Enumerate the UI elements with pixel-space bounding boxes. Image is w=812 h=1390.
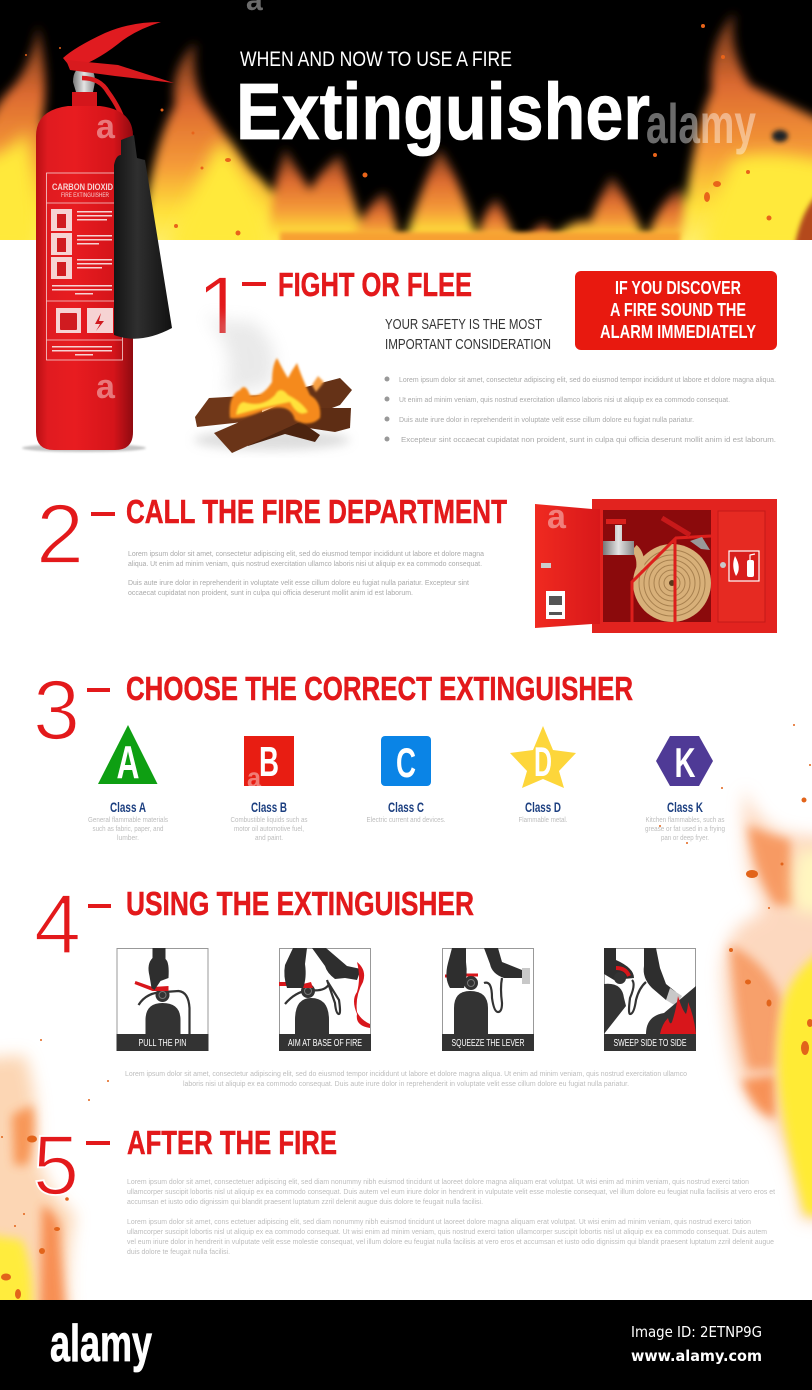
dash xyxy=(87,688,110,692)
icon: campfire xyxy=(194,315,352,453)
step: pull the pin: PULL THE PIN xyxy=(138,1038,186,1049)
class C badge xyxy=(381,736,431,786)
class A badge: A xyxy=(116,736,140,788)
class B badge: B xyxy=(259,738,279,785)
open door xyxy=(535,504,600,628)
class D badge xyxy=(510,726,576,788)
flames xyxy=(230,358,320,424)
heading: main title: Extinguisher xyxy=(236,67,650,156)
bracket xyxy=(632,536,711,622)
step: sweep side to side xyxy=(604,948,696,1051)
fire classes row xyxy=(88,725,725,842)
class D label: Class D xyxy=(525,799,561,815)
heading: small title line: WHEN AND NOW TO USE A FIRE xyxy=(240,48,512,71)
smoke xyxy=(205,315,274,395)
step: aim at base of fire xyxy=(279,948,371,1051)
upper lever xyxy=(63,22,161,69)
step: pull the pin xyxy=(116,948,208,1051)
section 5 heading group xyxy=(33,1118,337,1212)
silver valve xyxy=(73,67,95,92)
footer logo: alamy xyxy=(50,1315,152,1373)
number 4: 4 xyxy=(34,877,81,971)
class C badge: C xyxy=(396,739,416,786)
class K label: Kitchen flammables, such as xyxy=(646,817,725,824)
logs xyxy=(195,395,262,427)
fire extinguisher xyxy=(22,22,174,452)
class D badge: D xyxy=(534,738,552,785)
title: USING THE EXTINGUISHER xyxy=(126,885,474,922)
alarm callout: IF YOU DISCOVER xyxy=(615,278,741,298)
header fire band xyxy=(0,0,812,255)
step: aim at base of fire: AIM AT BASE OF FIRE xyxy=(288,1038,362,1049)
section 2 body text: aliqua. Ut enim ad minim veniam, quis nostrud exercitation ullamco laboris nisi ut aliquip ex ea commodo consequat. xyxy=(128,561,482,568)
safety statement: YOUR SAFETY IS THE MOST xyxy=(385,316,542,333)
class K badge xyxy=(656,736,713,786)
section 4 body text: laboris nisi ut aliquip ex ea commodo consequat. Duis aute irure dolor in reprehenderit in voluptate velit esse cillum dolore eu fugiat nulla pariatur. xyxy=(183,1081,629,1088)
step: squeeze the lever xyxy=(442,948,534,1051)
class B badge xyxy=(244,736,294,793)
class K label: Class K xyxy=(667,799,703,815)
class A label: General flammable materials xyxy=(88,817,168,824)
door sticker xyxy=(546,591,565,619)
section 2 body text: occaecat cupidatat non proident, sunt in culpa qui officia deserunt mollit anim id est laborum. xyxy=(128,590,413,597)
class K label xyxy=(645,799,725,842)
section 4 body text: Lorem ipsum dolor sit amet, consectetur adipiscing elit, sed do eiusmod tempor incididunt ut labore et dolore magna aliqua. Ut enim ad minim veniam, quis nostrud exercitation ullamco xyxy=(125,1071,687,1078)
hose coil xyxy=(633,544,711,622)
alarm callout xyxy=(575,271,777,350)
class B label: motor oil automotive fuel, xyxy=(234,826,304,833)
section 4 heading group xyxy=(34,877,474,971)
base glow xyxy=(278,228,682,240)
section 5 body text: accumsan et iusto odio dignissim qui blandit praesent luptatum zzril delenit augue duis dolore te feugait nulla facilisi. xyxy=(127,1199,483,1206)
section 5 body text: ullamcorper suscipit lobortis nisl ut aliquip ex ea commodo consequat. Duis autem vel eum iriure dolor in hendrerit in vulputate velit esse molestie consequat, vel illum dolore eu feugiat nulla facilisis at vero eros et xyxy=(127,1189,775,1196)
class B label: Combustible liquids such as xyxy=(230,817,308,824)
label pictograms xyxy=(51,209,113,356)
number 3: 3 xyxy=(33,663,80,757)
hose xyxy=(82,78,128,140)
safety statement: IMPORTANT CONSIDERATION xyxy=(385,336,551,353)
section 3 heading group xyxy=(33,663,633,757)
safety statement xyxy=(385,316,551,353)
cylinder body xyxy=(36,106,133,450)
bullet list: Excepteur sint occaecat cupidatat non proident, sunt in culpa qui officia deserunt mollit anim id est laborum. xyxy=(401,437,776,444)
image id: Image ID: 2ETNP9G xyxy=(631,1323,762,1341)
section 5 body text: duis dolore te feugait nulla facilisi. xyxy=(127,1249,230,1256)
class C label xyxy=(366,799,446,824)
step: sweep side to side: SWEEP SIDE TO SIDE xyxy=(614,1038,687,1049)
step: squeeze the lever: SQUEEZE THE LEVER xyxy=(452,1038,524,1049)
lower lever xyxy=(66,60,174,83)
embers xyxy=(25,24,772,236)
section 2 heading group xyxy=(36,487,507,581)
right door xyxy=(718,511,765,622)
alarm callout: A FIRE SOUND THE xyxy=(610,300,746,320)
section 5 body text: Lorem ipsum dolor sit amet, consectetuer adipiscing elit, sed diam nonummy nibh euismod tincidunt ut laoreet dolore magna aliquam erat volutpat. Ut wisi enim ad minim veniam, quis nostrud exerci tation xyxy=(127,1179,749,1186)
title: CALL THE FIRE DEPARTMENT xyxy=(126,493,507,530)
label title: CARBON DIOXID xyxy=(52,182,113,193)
class A badge xyxy=(98,725,158,788)
class D label: Flammable metal. xyxy=(518,817,568,824)
extinguisher sign xyxy=(729,551,759,581)
class A label: Class A xyxy=(110,799,146,815)
bullet list xyxy=(384,376,776,444)
footer url: www.alamy.com xyxy=(631,1347,762,1365)
tap xyxy=(603,525,634,555)
watermark wordmark: alamy xyxy=(646,92,756,155)
class B label: Class B xyxy=(251,799,287,815)
label xyxy=(46,173,122,360)
section 2 body text: Lorem ipsum dolor sit amet, consectetur adipiscing elit, sed do eiusmod tempor incididunt ut labore et dolore magna xyxy=(128,551,484,558)
class A label: such as fabric, paper, and xyxy=(92,826,164,833)
section 5 body text: ullamcorper suscipit lobortis nisl ut aliquip ex ea commodo consequat. Ut wisi enim ad minim veniam, quis nostrud exerci tation ullamcorper suscipit lobortis nisl ut aliquip ex ea commodo consequat. Duis autem xyxy=(127,1229,767,1236)
bullet list: Duis aute irure dolor in reprehenderit in voluptate velit esse cillum dolore eu fugiat nulla pariatur. xyxy=(399,417,694,424)
shadow xyxy=(22,444,146,452)
class K label: pan or deep fryer. xyxy=(661,835,709,842)
title: FIGHT OR FLEE xyxy=(278,266,472,303)
class B badge: a xyxy=(247,762,261,793)
neck xyxy=(72,92,97,112)
dash xyxy=(242,282,266,286)
section 5 body text xyxy=(127,1179,775,1256)
class K label: grease or fat used in a frying xyxy=(645,826,725,833)
hose cabinet xyxy=(535,498,777,633)
dash xyxy=(91,512,115,516)
bullet list: Ut enim ad minim veniam, quis nostrud exercitation ullamco laboris nisi ut aliquip ex ea commodo consequat. xyxy=(399,397,730,404)
class A label xyxy=(88,799,168,842)
bullet list: Lorem ipsum dolor sit amet, consectetur adipiscing elit, sed do eiusmod tempor incididunt ut labore et dolore magna aliqua. xyxy=(399,377,776,384)
label subtitle: FIRE EXTINGUISHER xyxy=(61,193,110,199)
lower left flames xyxy=(0,1039,109,1320)
class B label: and paint. xyxy=(255,835,283,842)
black horn xyxy=(114,135,172,339)
section 2 body text: Duis aute irure dolor in reprehenderit in voluptate velit esse cillum dolore eu fugiat nulla pariatur. Excepteur sint xyxy=(128,580,469,587)
section 5 body text: Lorem ipsum dolor sit amet, cons ectetuer adipiscing elit, sed diam nonummy nibh euismod tincidunt ut laoreet dolore magna aliquam erat volutpat. Ut wisi enim ad minim veniam, quis nostrud exerci tation xyxy=(127,1219,751,1226)
yellow flame cores xyxy=(0,128,812,240)
right side flames xyxy=(659,724,812,1225)
dash xyxy=(88,904,111,908)
flames xyxy=(0,12,812,255)
class D label xyxy=(518,799,568,824)
door handle xyxy=(541,563,551,568)
cabinet interior xyxy=(603,510,711,622)
section 4 body text xyxy=(125,1071,687,1088)
title: AFTER THE FIRE xyxy=(127,1124,337,1161)
watermark letters: a xyxy=(96,108,116,146)
dash xyxy=(86,1141,110,1145)
nozzle xyxy=(662,518,690,535)
class A label: lumber. xyxy=(117,835,139,842)
dark flame accents xyxy=(772,130,812,250)
class C label: Electric current and devices. xyxy=(366,817,446,824)
number 1: 1 xyxy=(196,259,246,359)
title: CHOOSE THE CORRECT EXTINGUISHER xyxy=(126,670,633,707)
alarm callout: ALARM IMMEDIATELY xyxy=(600,322,756,342)
shadow xyxy=(194,430,350,450)
class K badge: K xyxy=(674,739,696,786)
watermark letter: a xyxy=(547,498,567,536)
cabinet frame xyxy=(592,499,777,633)
number 2: 2 xyxy=(36,487,84,581)
section 1 heading group xyxy=(206,272,472,333)
footer band xyxy=(0,1300,812,1390)
watermark letter lower: a xyxy=(96,368,116,406)
number 5: 5 xyxy=(33,1118,79,1212)
class C label: Class C xyxy=(388,799,424,815)
section 2 body text xyxy=(128,551,484,597)
section 5 body text: vel eum iriure dolor in hendrerit in vulputate velit esse molestie consequat, vel illum dolore eu feugiat nulla facilisis at vero eros et accumsan et iusto odio dignissim qui blandit praesent luptatum zzril delenit augue xyxy=(127,1239,774,1246)
class B label xyxy=(230,799,308,842)
door knob xyxy=(720,562,726,568)
